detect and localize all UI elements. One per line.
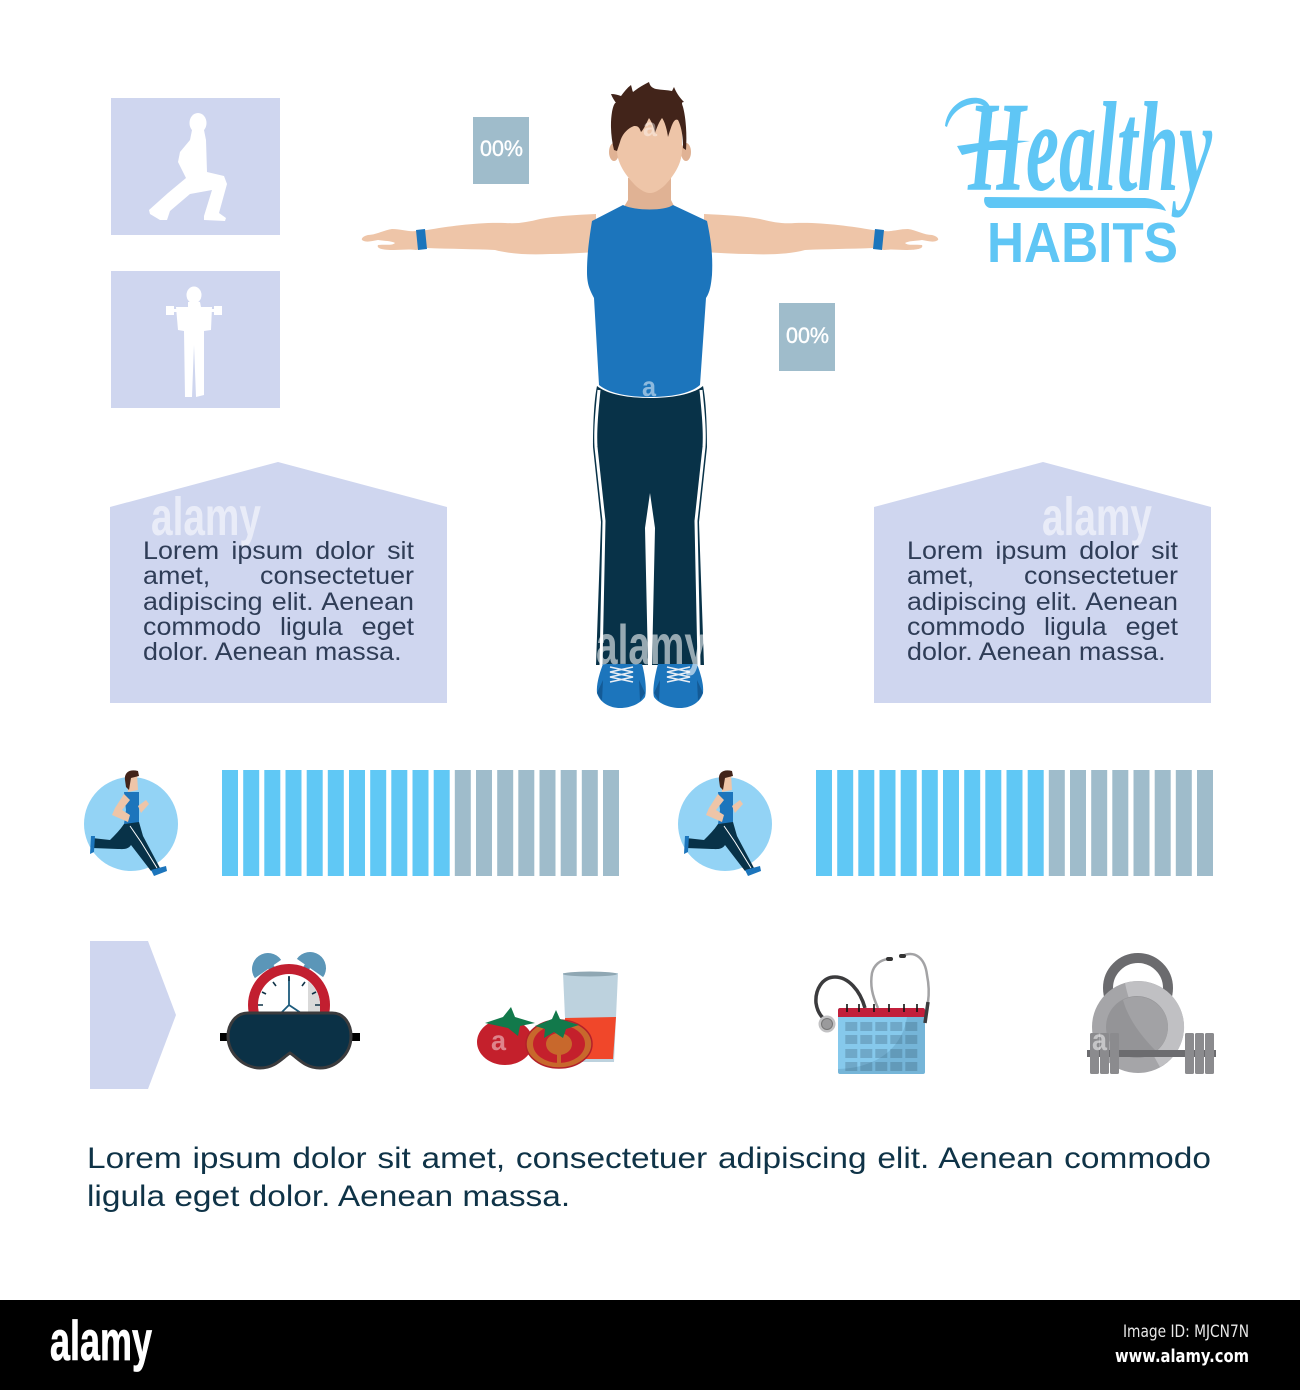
percent box right bbox=[779, 303, 835, 371]
pants bbox=[593, 386, 707, 665]
progress bars right bbox=[816, 770, 1213, 876]
chevron arrow bbox=[90, 941, 176, 1089]
text block: bottom description bbox=[87, 1142, 1211, 1213]
runner badge left bbox=[84, 770, 178, 876]
icon: tomatoes and juice bbox=[477, 972, 618, 1068]
text block: right panel: commodo ligula eget bbox=[907, 613, 1178, 641]
left arm and hand bbox=[362, 214, 596, 254]
watermark: right panel: alamy bbox=[1042, 487, 1152, 547]
neck bbox=[622, 178, 676, 210]
watermark: kettlebell mark: a bbox=[1092, 1024, 1107, 1057]
panel: left text background bbox=[110, 462, 447, 703]
panel: right text background bbox=[874, 462, 1211, 703]
watermark: forehead mark: a bbox=[643, 112, 658, 142]
percent box right: 00% bbox=[786, 323, 829, 348]
text block: left panel: dolor. Aenean massa. bbox=[143, 638, 402, 666]
runner badge right bbox=[678, 770, 772, 876]
progress bars left bbox=[222, 770, 619, 876]
text block: right panel: amet, consectetuer bbox=[907, 562, 1178, 590]
icon: calendar and stethoscope bbox=[816, 954, 929, 1074]
text block: left panel: commodo ligula eget bbox=[143, 613, 414, 641]
tank top bbox=[587, 205, 712, 397]
footer bar: www.alamy.com bbox=[1115, 1346, 1249, 1367]
text block: left panel: amet, consectetuer bbox=[143, 562, 414, 590]
watermark: trousers: alamy bbox=[596, 613, 706, 676]
text block: bottom description: ligula eget dolor. Aenean massa. bbox=[87, 1180, 570, 1213]
watermark: left panel: alamy bbox=[151, 487, 261, 547]
percent box left: 00% bbox=[480, 136, 523, 161]
text block: left panel: adipiscing elit. Aenean bbox=[143, 588, 414, 616]
footer bar bbox=[0, 1300, 1300, 1390]
text block: bottom description: Lorem ipsum dolor sit amet, consectetuer adipiscing elit. Aenean commodo bbox=[87, 1142, 1211, 1175]
text block: right panel bbox=[907, 537, 1178, 666]
face bbox=[617, 118, 682, 193]
person figure bbox=[362, 82, 938, 708]
text block: left panel bbox=[143, 537, 414, 666]
title: Habits: HABITS bbox=[987, 211, 1178, 275]
left shoe bbox=[597, 664, 646, 708]
panel: lunge exercise bbox=[111, 98, 280, 235]
title: Healthy bbox=[945, 76, 1213, 218]
watermark: tomato mark: a bbox=[491, 1025, 506, 1056]
text block: right panel: dolor. Aenean massa. bbox=[907, 638, 1166, 666]
watermark: shirt mark: a bbox=[642, 371, 656, 402]
text block: left panel: Lorem ipsum dolor sit bbox=[143, 537, 414, 565]
icon: alarm clock and sleep mask bbox=[220, 946, 360, 1068]
icon: kettlebell and dumbbell bbox=[1087, 958, 1216, 1074]
hair bbox=[611, 82, 686, 151]
footer bar: Image ID: MJCN7N bbox=[1123, 1322, 1249, 1341]
percent box left bbox=[473, 117, 529, 184]
right shoe bbox=[653, 664, 703, 708]
panel: dumbbell exercise bbox=[111, 271, 280, 408]
pants side stripes bbox=[596, 390, 704, 665]
footer bar: alamy bbox=[50, 1309, 152, 1372]
right arm and hand bbox=[704, 214, 938, 254]
text block: right panel: Lorem ipsum dolor sit bbox=[907, 537, 1178, 565]
text block: right panel: adipiscing elit. Aenean bbox=[907, 588, 1178, 616]
ears bbox=[609, 143, 691, 161]
